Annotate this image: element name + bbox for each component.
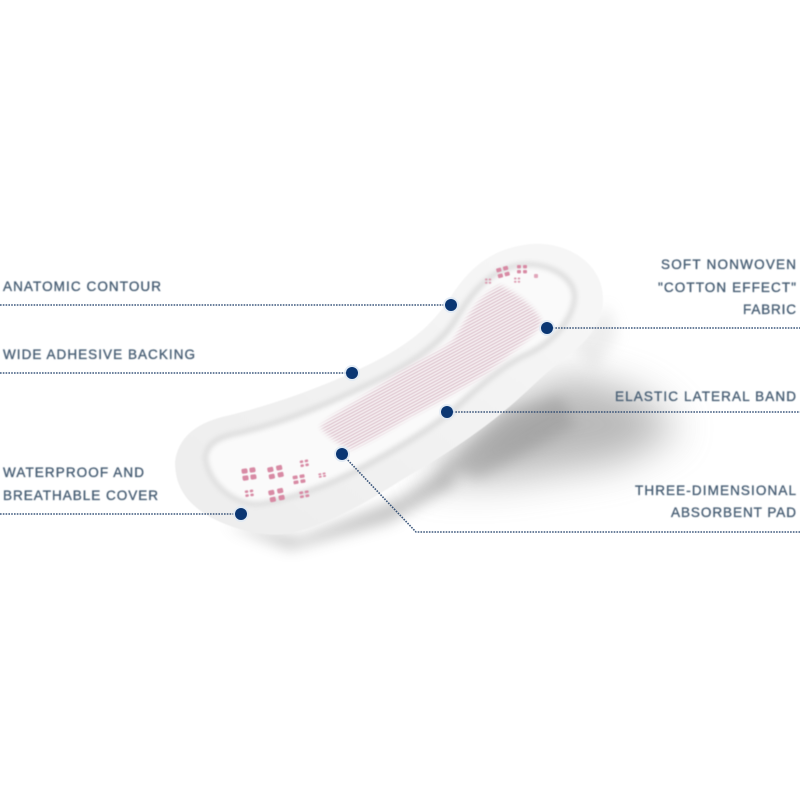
label: elastic lateral band: ELASTIC LATERAL BAND	[615, 389, 796, 404]
label: three-dimensional absorbent pad: THREE-DIMENSIONAL	[635, 483, 796, 498]
label: anatomic contour: ANATOMIC CONTOUR	[3, 279, 161, 294]
label: three-dimensional absorbent pad: ABSORBENT PAD	[671, 505, 796, 520]
label: soft nonwoven cotton effect fabric	[658, 257, 796, 317]
pad shadow	[225, 305, 680, 549]
callout lines	[0, 305, 800, 532]
pink flower pattern: upper end	[485, 265, 538, 284]
pink flower pattern: lower end	[241, 459, 326, 503]
label: waterproof and breathable cover: BREATHABLE COVER	[3, 488, 158, 503]
label: waterproof and breathable cover	[3, 465, 158, 503]
label: three-dimensional absorbent pad	[635, 483, 796, 520]
label: soft nonwoven cotton effect fabric: FABRIC	[743, 302, 796, 317]
label: waterproof and breathable cover: WATERPROOF AND	[3, 465, 144, 480]
callout markers	[233, 297, 555, 522]
label: soft nonwoven cotton effect fabric: "COTTON EFFECT"	[658, 280, 796, 295]
absorbent pad: inner core shading	[203, 262, 577, 506]
absorbent pad: inner core	[208, 267, 572, 501]
pad illustration	[175, 244, 603, 535]
label: wide adhesive backing: WIDE ADHESIVE BACKING	[3, 347, 195, 362]
wide adhesive backing: outer pad	[175, 244, 603, 535]
ribbed central area	[320, 284, 542, 451]
label: soft nonwoven cotton effect fabric: SOFT NONWOVEN	[661, 257, 796, 272]
